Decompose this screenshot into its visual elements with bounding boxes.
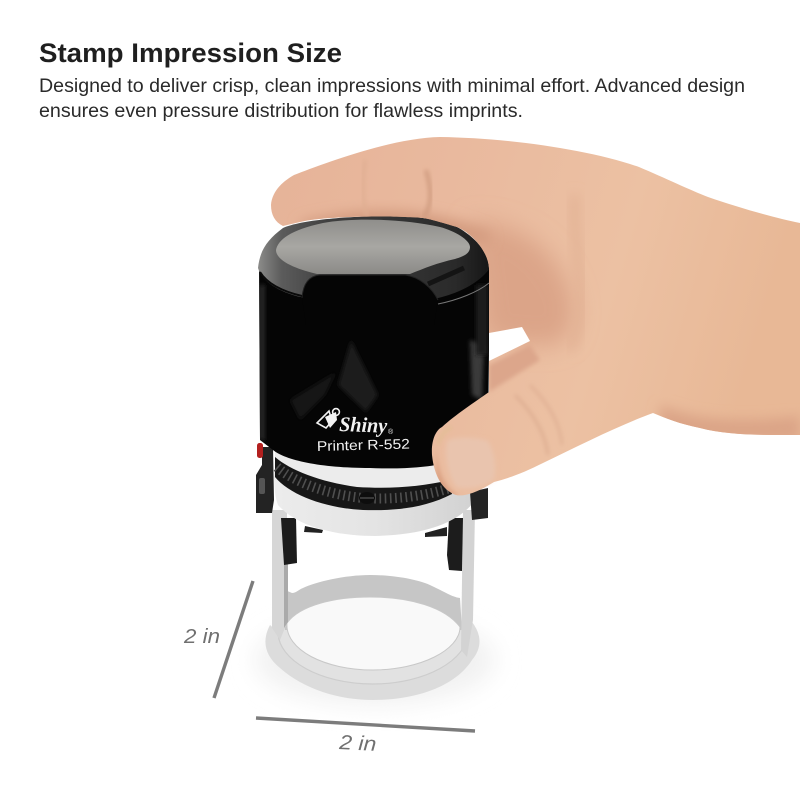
ratchet ring	[275, 445, 455, 510]
illustration: hand holding stamp	[255, 137, 800, 705]
ground shadow	[255, 615, 495, 705]
inner raised ring	[278, 623, 468, 684]
dimension: horizontal	[256, 718, 475, 756]
stamp body	[258, 216, 490, 468]
label: 2 in height: 2 in	[183, 625, 220, 648]
dimension: vertical	[183, 581, 253, 698]
description text	[39, 75, 745, 122]
cap top face	[276, 220, 470, 274]
icon: rose logo	[317, 409, 339, 428]
description text: ensures even pressure distribution for flawless imprints.	[39, 100, 523, 122]
cap rim	[258, 216, 490, 298]
side brackets	[256, 447, 274, 513]
legs	[281, 518, 297, 565]
product logo text: Shiny	[339, 412, 388, 438]
hand	[271, 137, 800, 496]
upper grey band	[285, 575, 462, 630]
frame posts	[272, 510, 287, 640]
opening	[287, 597, 460, 670]
icon: thumbnail	[446, 438, 495, 488]
gap between fingers	[489, 327, 530, 361]
outer base crescent	[265, 622, 480, 700]
lower collar	[274, 470, 473, 536]
product logo text: ®	[388, 428, 394, 436]
icon: red button	[257, 443, 263, 458]
label: 2 in width: 2 in	[338, 731, 377, 756]
stamp base	[265, 510, 480, 700]
title: Stamp Impression Size	[39, 38, 342, 68]
stamp frame and legs	[256, 443, 488, 571]
product logo text	[317, 409, 410, 454]
product logo text: Printer R-552	[317, 436, 410, 454]
front latch	[302, 275, 438, 325]
description text: Designed to deliver crisp, clean impressions with minimal effort. Advanced design	[39, 75, 745, 97]
